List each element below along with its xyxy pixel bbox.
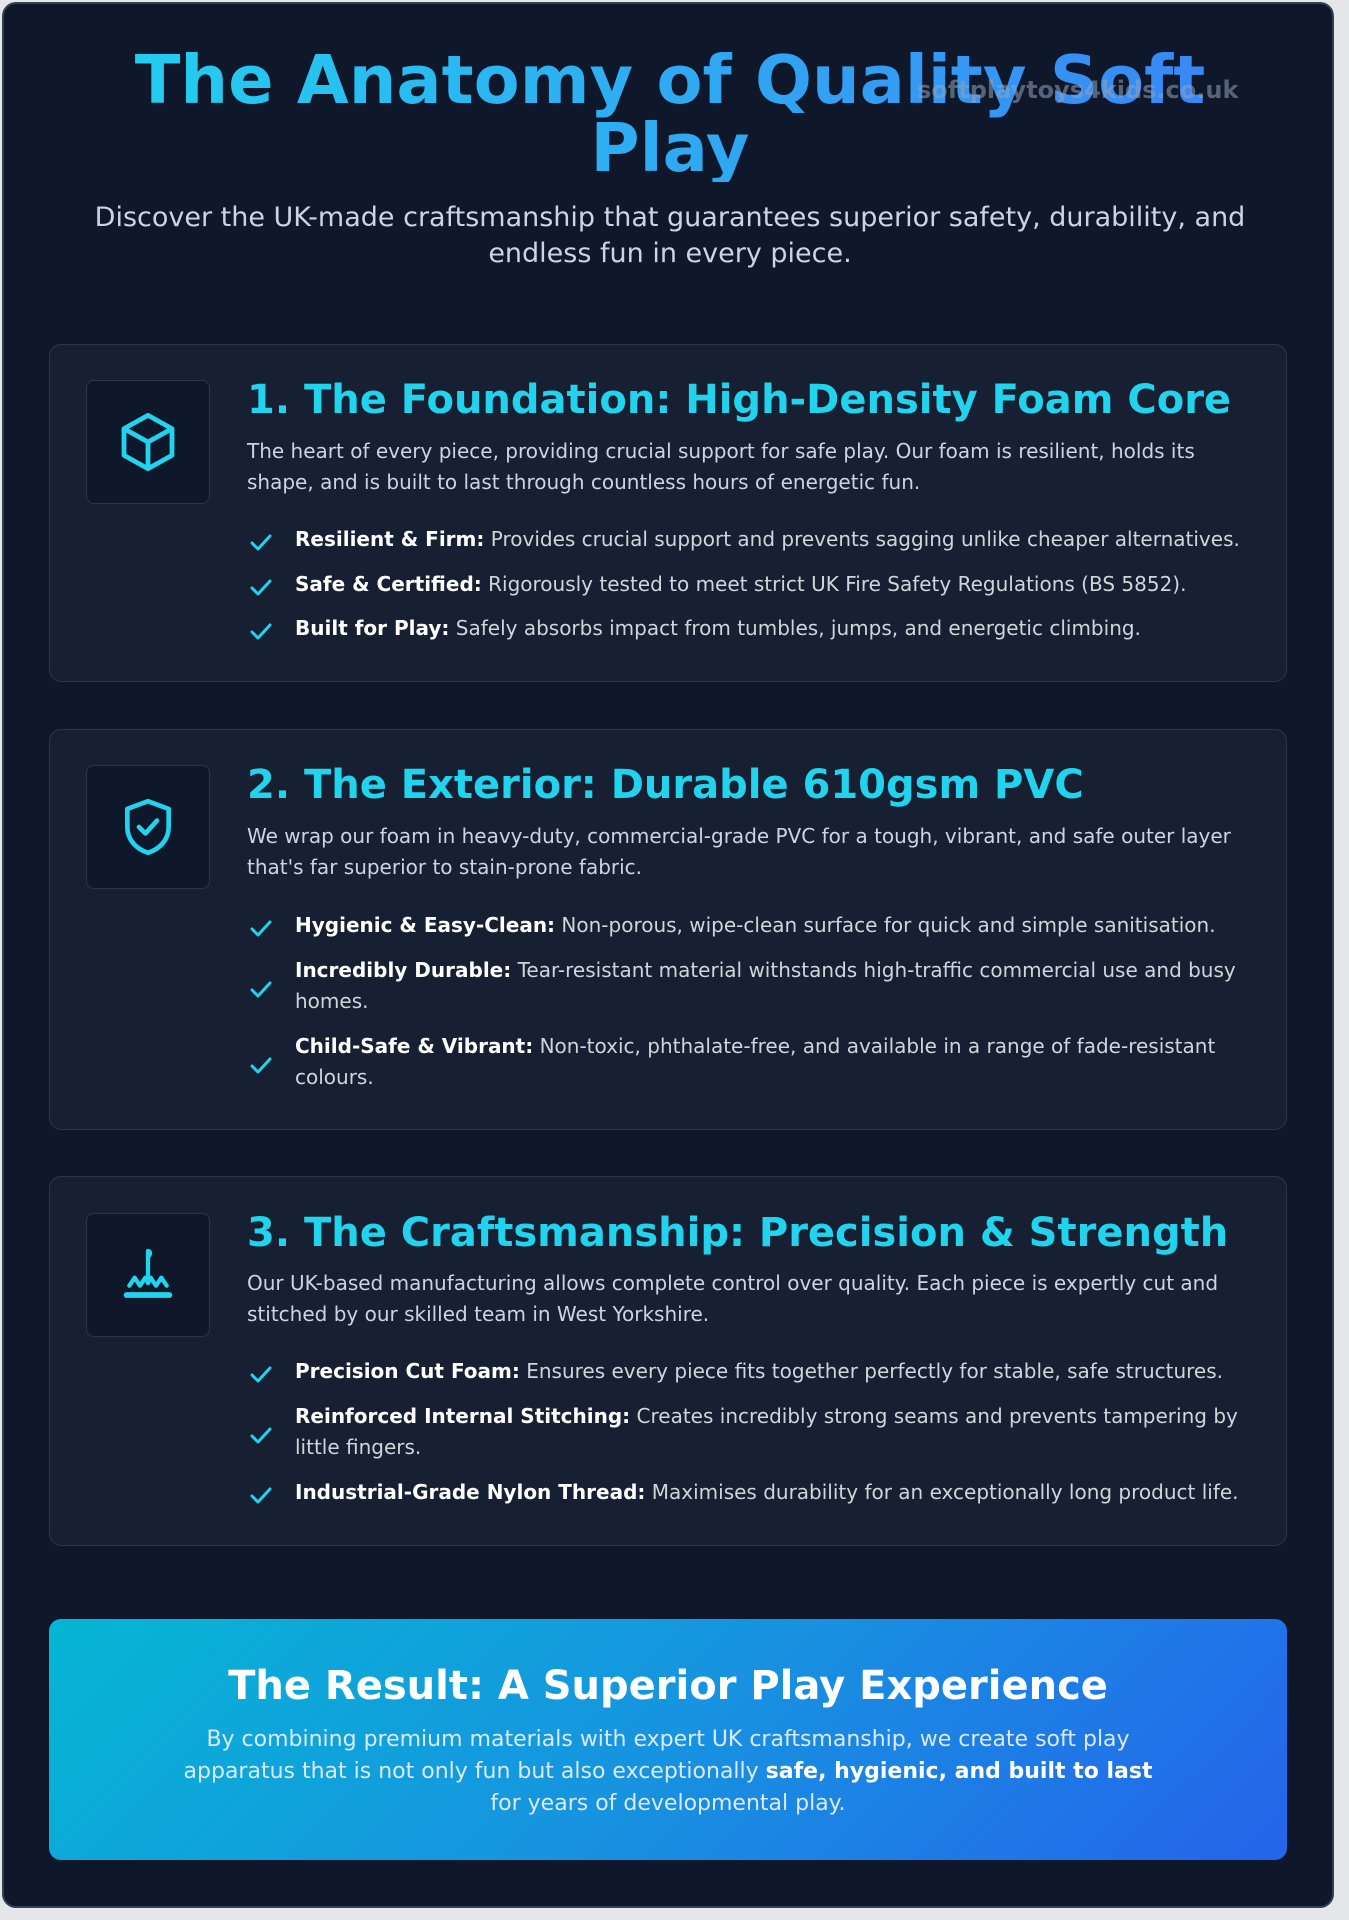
bullets 1: Safe & Certified: Rigorously tested to meet strict UK Fire Safety Regulations (BS 5852).: [295, 572, 1186, 596]
paragraph 3: Our UK-based manufacturing allows complete control over quality. Each piece is expertly cut and stitched by our skilled team in West Yorkshire.: [247, 1271, 1218, 1326]
watermark: softplaytoys4kids.co.uk: [917, 76, 1238, 104]
icon: shield: [86, 765, 210, 889]
bullets 2: Hygienic & Easy-Clean: Non-porous, wipe-clean surface for quick and simple sanitisation.: [295, 913, 1216, 937]
result heading: The Result: A Superior Play Experience: [228, 1663, 1108, 1709]
bullets 3: Precision Cut Foam: Ensures every piece fits together perfectly for stable, safe structures.: [295, 1359, 1223, 1383]
bullets 2: [250, 913, 1236, 1089]
heading 1: 1. The Foundation: High-Density Foam Core: [247, 377, 1231, 423]
result text: By combining premium materials with expert UK craftsmanship, we create soft play apparatus that is not only fun but also exceptionally safe, hygienic, and built to last for years of developmental play.: [184, 1727, 1152, 1816]
title: The Anatomy of Quality Soft: [135, 41, 1205, 119]
paragraph 1: The heart of every piece, providing crucial support for safe play. Our foam is resilient, holds its shape, and is built to last through countless hours of energetic fun.: [247, 439, 1195, 494]
bullets 1: [250, 527, 1240, 640]
bullets 3: [250, 1359, 1239, 1504]
panel: PVC exterior: [49, 729, 1287, 1130]
title: Play: [591, 109, 749, 187]
subtitle: Discover the UK-made craftsmanship that guarantees superior safety, durability, and endless fun in every piece.: [95, 202, 1245, 269]
icon: stitching: [86, 1213, 210, 1337]
panel: craftsmanship: [49, 1176, 1287, 1546]
bullets 3: Industrial-Grade Nylon Thread: Maximises durability for an exceptionally long product life.: [295, 1480, 1239, 1504]
bullets 1: Built for Play: Safely absorbs impact from tumbles, jumps, and energetic climbing.: [295, 616, 1141, 640]
bullets 2: Incredibly Durable: Tear-resistant material withstands high-traffic commercial use and busy homes.: [295, 958, 1236, 1013]
bullets 3: Reinforced Internal Stitching: Creates incredibly strong seams and prevents tampering by little fingers.: [295, 1404, 1238, 1459]
bullets 1: Resilient & Firm: Provides crucial support and prevents sagging unlike cheaper alternatives.: [295, 527, 1240, 551]
title: [40, 46, 1300, 182]
bullets 2: Child-Safe & Vibrant: Non-toxic, phthalate-free, and available in a range of fade-resistant colours.: [295, 1034, 1215, 1089]
paragraph 2: We wrap our foam in heavy-duty, commercial-grade PVC for a tough, vibrant, and safe outer layer that's far superior to stain-prone fabric.: [247, 824, 1231, 879]
heading 3: 3. The Craftsmanship: Precision & Strength: [247, 1210, 1228, 1256]
heading 2: 2. The Exterior: Durable 610gsm PVC: [247, 762, 1084, 808]
callout: result: [49, 1619, 1287, 1860]
panel: foam core: [49, 344, 1287, 682]
icon: cube: [86, 380, 210, 504]
